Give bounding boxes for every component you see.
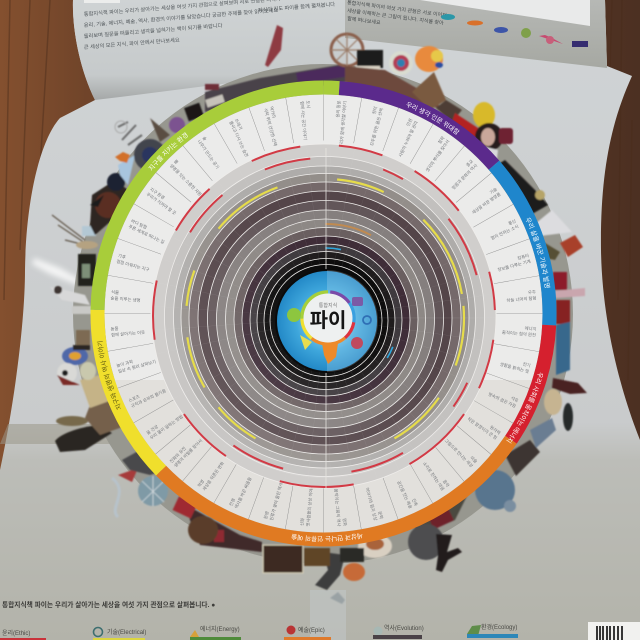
legend: energy: 에너지(Energy) [200,625,240,633]
sector labels left: 줄이고 다시 쓰는 습관 [227,120,250,158]
white sail [530,210,572,236]
sector labels right: 공간을 짓는 예술 [395,480,414,510]
sector labels left: 함께 사는 공간 이야기 [298,101,309,140]
black block [357,50,383,68]
blueprint [530,418,556,448]
sector labels left: 바다 탐험 [130,218,148,230]
football target [57,347,96,385]
sector labels right: 소리로 전하는 마음 [421,460,446,492]
sector labels right: 세상을 바꾼 발명품 [470,191,502,216]
sector labels right: 윤리 질문 [335,100,342,118]
white panel top right [420,0,590,26]
wheel [331,34,363,66]
sector labels right: 움직이는 그림의 역사 [332,488,343,527]
top band photos [205,64,345,112]
intro text left: 둘러보며 질문을 떠올리고 생각을 넓혀가는 책이 되기를 바랍니다 [84,21,223,40]
sector labels left [110,100,315,527]
sector labels right: 정보를 다루는 기계 [497,258,531,273]
sector labels right: 인권 [405,118,413,127]
title: 파이 [310,309,346,332]
blue sky [118,155,135,185]
ring labels: 우리 삶을 바꾼 기술과 발명 [526,218,550,288]
sector labels right: 생각의 뿌리를 찾아서 [424,138,451,173]
sector labels right: 정의 [371,106,378,115]
sector labels left: 진화와 유전 [169,446,187,464]
sector labels left: 세상을 뒤흔든 변화 [201,460,226,492]
white plate [358,534,392,558]
top flap left [73,0,347,100]
red flag [265,25,283,67]
sector labels right: 컴퓨터 [517,253,530,261]
intro text right: 통합지식책 파이의 여섯 가지 관점은 서로 이어져 [347,0,447,19]
sector labels left: 신화 [299,518,305,526]
red range arcs [153,145,495,487]
caption: 통합지식책 파이는 우리가 살아가는 세상을 여섯 가지 관점으로 살펴봅니다. ● [2,600,215,609]
flap icons [441,14,588,47]
barcode [588,622,640,640]
green segment [98,88,550,540]
fold crease [325,148,327,490]
photo collage around the ring [50,25,587,604]
beige photo [80,375,112,408]
sector labels left: 푸른 세계로 떠나는 길 [127,223,166,246]
sector labels right: 하늘 너머의 탐험 [506,294,537,304]
ring labels: 지구를 지키는 환경 [148,132,188,170]
sector labels left: 물 [173,159,179,165]
sector labels right: 건축 [411,498,419,507]
legend: art: 예술(Epic) [298,626,325,634]
red boat [118,468,138,482]
sector labels left: 문명 [263,511,270,520]
folded lower shading [0,424,130,444]
intro text left: 지식의 지도 파이를 함께 펼쳐봅니다 [258,0,335,14]
ring labels [96,102,550,542]
purple segment [98,88,550,540]
subtitle: 통합지식 [319,302,337,309]
sector labels right: 이야기의 힘과 상상 [364,487,379,521]
intro text left [84,0,335,51]
legend: history: 역사(Evolution) [384,624,424,632]
sector labels right: 생활을 밝히는 빛 [499,360,530,375]
sector labels right: 영화 [342,518,348,526]
center icons [287,308,301,322]
blue segment [98,88,550,540]
sector labels right: 종교 [465,159,474,168]
legend: ecology: 환경(Ecology) [481,623,517,631]
tower [505,440,540,476]
sector labels left: 함께 살아가는 이웃 [111,329,145,339]
brown texture [85,395,128,435]
gray collar disc [73,64,573,564]
hat and bust [552,378,587,394]
sector labels right: 기술 [489,187,498,195]
sector labels right: 우리가 함께 생각할 이야기 [338,101,349,148]
sector labels left: 일상 속 원리 살펴보기 [117,358,157,375]
sector labels right: 에너지 [524,326,537,332]
sector labels right: 석유 [510,395,519,403]
sector labels right: 움직이는 힘의 원천 [502,329,536,339]
collage bottom right [410,490,470,535]
sector labels right: 문학 [377,511,384,520]
sector labels right: 원자력 [489,425,502,436]
lighter lower left wash [165,158,485,478]
sector labels right: 우주 [528,289,536,295]
sector labels left: 식물 [111,289,119,295]
sector labels left: 우리 몸이 일하는 방법 [148,413,184,441]
legend: ethics [0,629,46,640]
book and ornaments [560,235,583,257]
child figure [315,552,365,604]
sector labels left: 우리가 지켜야 할 곳 [145,191,178,217]
sector labels left: 먹거리 [269,106,277,119]
orange segment [98,88,550,540]
sector labels left: 지구 환경 [149,187,166,200]
white player [50,286,94,314]
intro text right: 세상을 이해하는 큰 그림이 됩니다. 지식을 찾아 [347,7,444,27]
sector labels left: 생명의 비밀을 찾아서 [172,437,204,469]
sector labels left: 나무가 만드는 공기 [196,138,221,170]
red book [173,496,197,518]
ring labels: 우리 사회를 움직이는 에너지 [506,372,543,444]
sector labels left: 기후 [117,253,126,260]
old photo [263,545,303,573]
dark figures right [492,160,548,218]
dome [134,139,166,171]
stone statue [56,416,88,426]
sail mast [150,118,170,142]
sector spokes [128,118,520,510]
sector labels right: 땅속의 검은 자원 [487,391,517,410]
dark box photos [78,254,96,286]
white sector disc [104,94,542,532]
red segment [98,88,550,540]
sector labels right: 철학 [437,135,446,145]
sector labels right: 믿음과 문화의 역사 [450,162,479,191]
sector labels left: 규칙과 승부의 즐거움 [130,387,167,410]
legend: history [373,624,424,639]
DNA strand [112,478,119,517]
sector labels left: 전쟁 [228,498,236,507]
blue robot [475,470,516,512]
ring labels: 우리 생각 인문 위대함 [406,102,460,135]
colored outer ring [98,88,550,540]
right half lighter [327,270,378,372]
sector labels right: 사람이 누려야 할 권리 [397,120,420,158]
moon [408,524,444,560]
robed figure [55,425,112,452]
sector labels right: 미술 [469,455,478,464]
center blue disc [276,270,378,372]
black dog [436,534,462,572]
sector labels right: 멀리 전하는 소식 [490,223,520,242]
light glare on fold [32,258,84,286]
intro text left: 큰 세상의 모든 지식, 파이 안에서 만나보세요 [84,35,180,51]
legend: energy [190,625,241,640]
tall ship [52,215,98,249]
turtle sphere [138,476,168,506]
dark machine [90,180,128,235]
sector labels left: 생명을 잇는 소중한 자원 [168,162,203,198]
sector labels left: 옛사람들의 상상 이야기 [304,484,315,527]
legend: ethics: 윤리(Ethic) [2,629,30,637]
sector labels left: 동물 [110,326,119,332]
bottom left photos [186,505,262,552]
sector labels right [332,100,537,527]
sector labels left: 스포츠 [128,394,141,403]
top flap right [345,0,607,68]
white center [304,294,352,342]
inner accent arcs [230,224,422,416]
white panel top left [84,0,120,3]
yellow range arcs [186,179,464,457]
mandala [389,51,413,75]
sector labels left: 쓰레기 [234,118,243,131]
vertical crease [310,590,346,640]
sector labels left: 점점 더워지는 지구 [116,258,150,273]
sector labels right: 그림으로 만나는 세상 [443,437,475,469]
sector labels left: 숲 [201,135,208,142]
intro text left: 윤리, 기술, 에너지, 예술, 역사, 환경의 이야기를 담았습니다 궁금한 주제를 찾아 읽어보세요 [84,6,279,29]
blue sphere [556,322,570,375]
yellow segment [98,88,550,540]
purple flower [169,117,185,133]
ring labels: 지구와 생명의 역사 이야기 [96,341,121,410]
sector labels right: 작은 알갱이의 큰 힘 [466,415,499,441]
intro text right: 함께 떠나보세요 [347,15,381,26]
legend: art [284,626,331,640]
red jar [499,128,513,144]
orange icon [115,152,130,163]
sector labels right: 전기 [522,361,531,368]
ring labels: 세상과 만나는 인류의 예술 [291,533,362,542]
cell dividers in rings [213,206,437,430]
legend: technology [93,628,146,640]
lower sector tint [112,380,535,542]
concentric data rings [152,144,496,488]
sector labels left: 혁명 [197,479,205,488]
legend: technology: 기술(Electrical) [107,628,146,636]
sticks and gears [118,122,142,145]
dark collage left [122,450,165,475]
yellow mask [473,102,495,128]
sector labels left: 숲을 이루는 생명 [110,294,141,304]
sector labels left: 식탁 위의 건강한 선택 [262,107,279,147]
legend: ecology [467,623,518,638]
sector labels left: 인류가 쌓아 올린 역사 [268,482,285,521]
red cloth [450,113,478,145]
patterned pot [415,46,443,72]
sector labels left: 역사를 바꾼 싸움들 [233,476,254,510]
sector labels right: 통신 [508,218,517,226]
sector labels left: 놀이 과학 [116,359,134,368]
sector labels right: 모두를 위한 옳은 선택 [368,107,385,147]
sector labels right: 음악 [442,479,450,488]
pagoda [412,72,446,110]
rainbow rim [302,292,354,344]
sector labels left: 도시 [305,100,311,109]
long hair portrait [475,123,503,167]
sector labels left: 몸 건강 [145,424,159,436]
